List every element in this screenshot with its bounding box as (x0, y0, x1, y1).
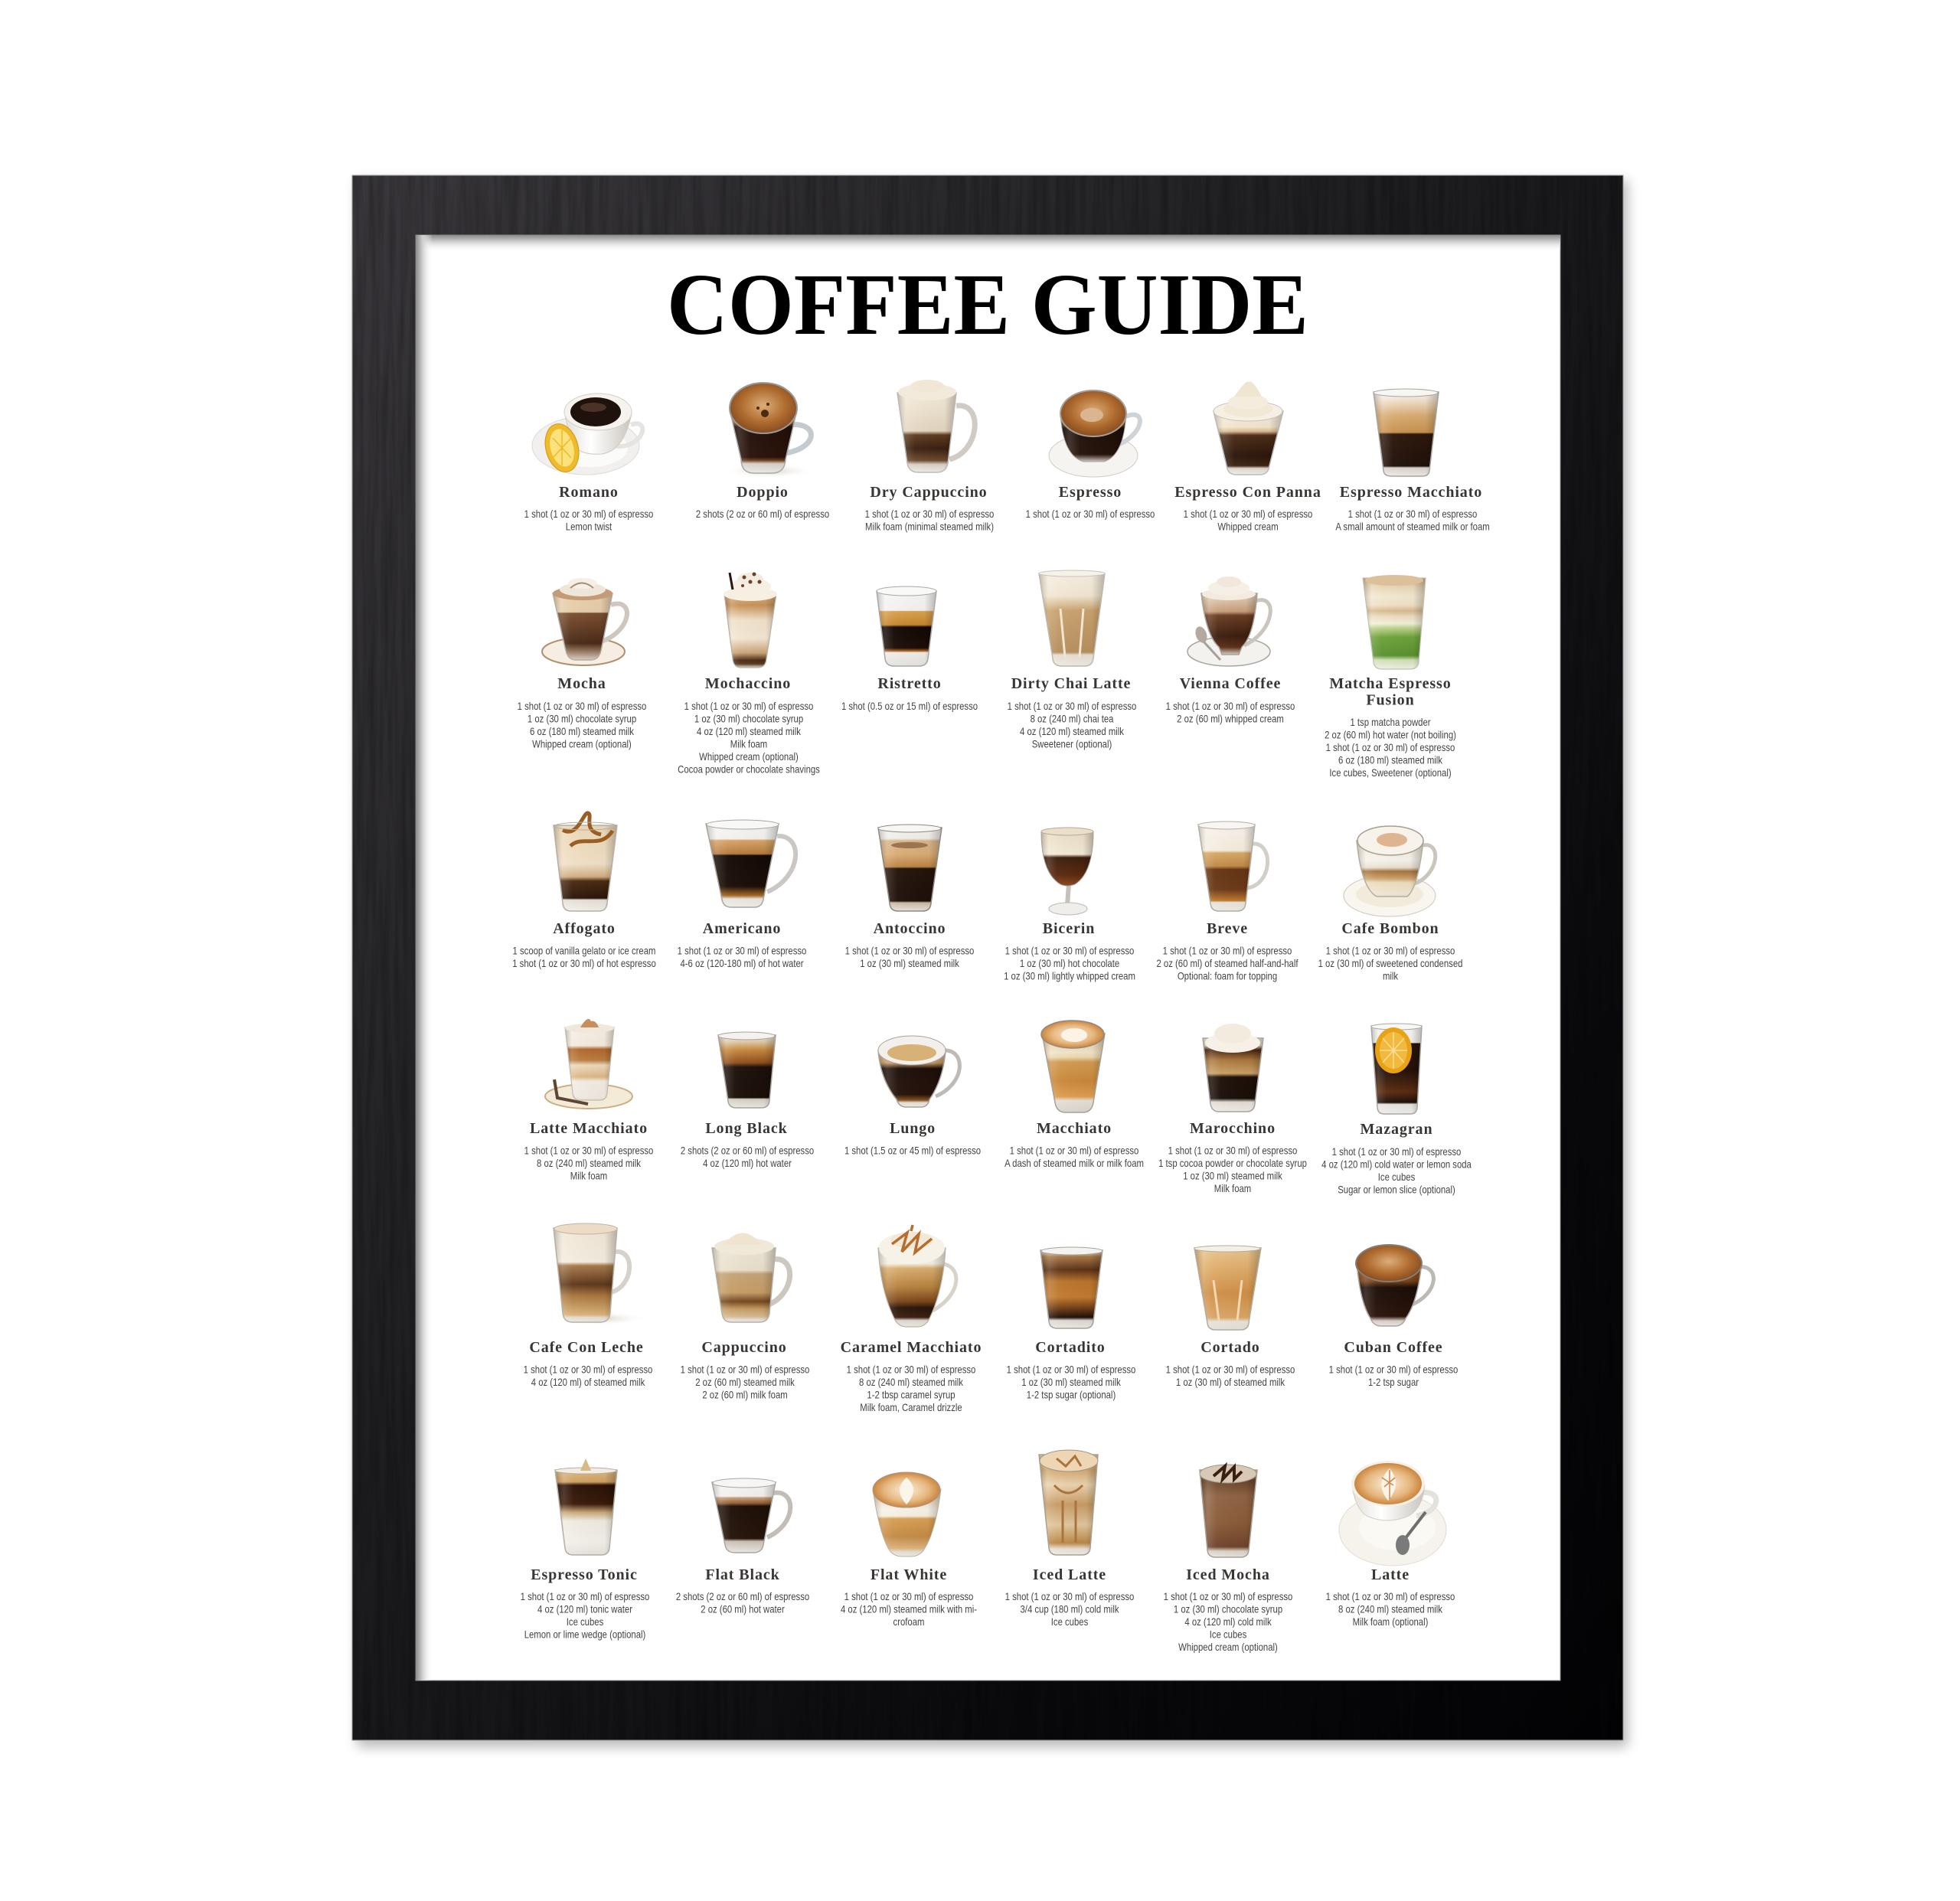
drink: Cuban Coffee (1329, 1245, 1458, 1388)
icon: Doppio glass (724, 383, 815, 479)
drink: Mochaccino (678, 573, 820, 776)
icon: Americano mug (706, 820, 795, 907)
ingredients: A small amount of steamed milk or foam (1335, 520, 1490, 533)
ingredients: 1 shot (1 oz or 30 ml) of espresso (1329, 1363, 1458, 1376)
ingredients: crofoam (893, 1615, 924, 1628)
name: Dirty Chai Latte (1011, 675, 1131, 692)
icon: Romano cup with lemon (532, 394, 642, 475)
ingredients: 1 shot (1 oz or 30 ml) of espresso (1166, 1363, 1295, 1376)
name: Iced Latte (1033, 1566, 1106, 1583)
icon: Long Black glass (718, 1032, 776, 1108)
ingredients: Milk foam (1214, 1182, 1251, 1194)
ingredients: 1 shot (1.5 oz or 45 ml) of espresso (844, 1144, 981, 1157)
ingredients: 1 oz (30 ml) of sweetened condensed (1318, 957, 1462, 969)
drink: Matcha Espresso Fusion (1325, 575, 1456, 779)
drink: Breve (1156, 821, 1298, 982)
ingredients: 1 shot (1 oz or 30 ml) of espresso (521, 1590, 649, 1602)
ingredients: 1 shot (1 oz or 30 ml) of espresso (1166, 700, 1295, 712)
ingredients: Sugar or lemon slice (optional) (1338, 1183, 1455, 1196)
ingredients: 2 oz (60 ml) hot water (not boiling) (1325, 728, 1456, 741)
ingredients: 1 shot (1 oz or 30 ml) of espresso (1184, 508, 1312, 520)
ingredients: 2 shots (2 oz or 60 ml) of espresso (676, 1590, 809, 1602)
title: COFFEE GUIDE (667, 256, 1308, 353)
ingredients: 1 oz (30 ml) chocolate syrup (528, 712, 636, 725)
icon: Cortadito glass (1040, 1247, 1102, 1328)
ingredients: 1-2 tsp sugar (optional) (1027, 1388, 1116, 1401)
ingredients: Sweetener (optional) (1032, 737, 1112, 750)
ingredients: 1 shot (1 oz or 30 ml) of espresso (865, 508, 994, 520)
ingredients: 8 oz (240 ml) steamed milk (537, 1157, 642, 1169)
ingredients: Ice cubes, Sweetener (optional) (1329, 766, 1452, 779)
icon: Macchiato glass (1041, 1021, 1105, 1112)
ingredients: 2 oz (60 ml) milk foam (702, 1388, 788, 1401)
ingredients: 1 oz (30 ml) hot chocolate (1020, 957, 1119, 969)
icon: Iced Mocha tall glass (1200, 1465, 1257, 1557)
icon: Dry Cappuccino mug (897, 380, 975, 472)
name: Vienna Coffee (1180, 675, 1281, 692)
ingredients: Ice cubes (1210, 1628, 1246, 1641)
icon: Marocchino glass (1203, 1024, 1263, 1112)
name: Romano (559, 484, 619, 501)
icon: Caramel Macchiato mug (878, 1225, 956, 1327)
ingredients: 4 oz (120 ml) cold milk (1184, 1615, 1272, 1628)
ingredients: 4 oz (120 ml) steamed milk (1020, 725, 1125, 737)
ingredients: A dash of steamed milk or milk foam (1004, 1157, 1144, 1169)
drink: Antoccino (845, 825, 974, 969)
drink: Cortado (1166, 1246, 1295, 1388)
ingredients: 4 oz (120 ml) cold water or lemon soda (1321, 1158, 1472, 1171)
ingredients: milk (1383, 969, 1399, 982)
ingredients: 1 shot (1 oz or 30 ml) of hot espresso (512, 957, 656, 969)
name: Cafe Bombon (1341, 920, 1439, 937)
ingredients: 1 shot (1 oz or 30 ml) of espresso (681, 1363, 809, 1376)
ingredients: 1 shot (1 oz or 30 ml) of espresso (518, 700, 646, 712)
ingredients: Optional: foam for topping (1178, 969, 1277, 982)
ingredients: 1 shot (1 oz or 30 ml) of espresso (1326, 1590, 1455, 1602)
ingredients: Milk foam, Caramel drizzle (860, 1401, 962, 1413)
ingredients: 1 tsp cocoa powder or chocolate syrup (1158, 1157, 1307, 1169)
ingredients: 1 tsp matcha powder (1350, 716, 1431, 728)
name: Cortadito (1035, 1339, 1106, 1356)
ingredients: 1 shot (1 oz or 30 ml) of espresso (1008, 700, 1136, 712)
name: Marocchino (1190, 1120, 1276, 1137)
drink: Cafe Bombon (1318, 826, 1462, 982)
icon: Cappuccino mug (712, 1233, 790, 1322)
name: Doppio (737, 484, 789, 501)
drink: Iced Mocha (1164, 1465, 1292, 1653)
name: Ristretto (877, 675, 942, 692)
name: Espresso Con Panna (1174, 484, 1321, 501)
name: Cuban Coffee (1344, 1339, 1443, 1356)
ingredients: 4 oz (120 ml) of steamed milk (531, 1376, 645, 1388)
drink: Espresso Macchiato (1335, 389, 1490, 533)
ingredients: 2 oz (60 ml) hot water (701, 1602, 785, 1615)
ingredients: 1 shot (1 oz or 30 ml) of espresso (1168, 1144, 1297, 1157)
ingredients: 3/4 cup (180 ml) cold milk (1021, 1602, 1119, 1615)
name: Antoccino (874, 920, 946, 937)
icon: Cuban Coffee glass (1356, 1245, 1433, 1326)
drink: Cappuccino (681, 1233, 809, 1401)
ingredients: 1-2 tbsp caramel syrup (867, 1388, 956, 1401)
ingredients: 1 shot (1 oz or 30 ml) of espresso (845, 944, 974, 957)
drink: Flat Black (676, 1478, 809, 1615)
ingredients: 1 shot (1 oz or 30 ml) of espresso (1326, 741, 1455, 753)
icon: Cafe Con Leche mug (554, 1223, 647, 1325)
icon: Matcha Espresso Fusion glass (1363, 575, 1426, 669)
ingredients: 8 oz (240 ml) steamed milk (859, 1376, 964, 1388)
name: Breve (1207, 920, 1248, 937)
ingredients: 1 oz (30 ml) steamed milk (1183, 1169, 1282, 1182)
drink: Latte (1326, 1461, 1455, 1628)
ingredients: 1 shot (1 oz or 30 ml) of espresso (844, 1590, 973, 1602)
drink: Bicerin (1004, 828, 1135, 982)
name: Mazagran (1361, 1121, 1432, 1138)
ingredients: Milk foam (570, 1169, 607, 1182)
drink: Espresso Con Panna (1174, 381, 1321, 533)
icon: Antoccino glass (878, 825, 942, 911)
name: Flat White (871, 1566, 947, 1583)
ingredients: 2 oz (60 ml) whipped cream (1177, 712, 1284, 725)
icon: Cafe Bombon glass on saucer (1344, 826, 1436, 916)
drink: Iced Latte (1005, 1450, 1134, 1628)
icon: Espresso Tonic glass (555, 1458, 617, 1555)
icon: Dirty Chai Latte glass (1039, 570, 1105, 666)
icon: Mocha glass on saucer (542, 578, 627, 665)
drink: Dirty Chai Latte (1008, 570, 1136, 750)
ingredients: Whipped cream (optional) (532, 737, 632, 750)
drink: Dry Cappuccino (865, 380, 994, 533)
ingredients: 8 oz (240 ml) chai tea (1031, 712, 1114, 725)
ingredients: Ice cubes (567, 1615, 603, 1628)
ingredients: 4 oz (120 ml) tonic water (537, 1602, 633, 1615)
ingredients: 6 oz (180 ml) steamed milk (1338, 753, 1443, 766)
panel: white poster (416, 235, 1560, 1681)
ingredients: 1 oz (30 ml) steamed milk (860, 957, 959, 969)
panel: black frame (352, 175, 1623, 1740)
name: Iced Mocha (1186, 1566, 1270, 1583)
name: Bicerin (1043, 920, 1095, 937)
ingredients: Lemon or lime wedge (optional) (524, 1628, 645, 1641)
drink: Cafe Con Leche (524, 1223, 652, 1388)
name: Mocha (557, 675, 606, 692)
ingredients: 1 shot (1 oz or 30 ml) of espresso (847, 1363, 975, 1376)
icon: Ristretto shot glass (877, 586, 936, 666)
icon: Espresso Macchiato glass (1374, 389, 1439, 476)
name: Flat Black (705, 1566, 780, 1583)
frame shadow (357, 181, 1628, 1747)
icon: Breve mug (1198, 821, 1268, 911)
name: Caramel Macchiato (841, 1339, 982, 1356)
name: Fusion (1366, 692, 1415, 709)
name: Mochaccino (705, 675, 791, 692)
name: Espresso Macchiato (1340, 484, 1482, 501)
drink: Doppio (696, 383, 829, 520)
drink: Cortadito (1007, 1247, 1135, 1401)
drink: Macchiato (1004, 1021, 1144, 1169)
drink: Espresso (1026, 390, 1155, 520)
icon: Flat White glass with latte art (873, 1472, 941, 1556)
ingredients: 1-2 tsp sugar (1368, 1376, 1419, 1388)
icon: Espresso cup on saucer (1049, 390, 1140, 477)
ingredients: Ice cubes (1051, 1615, 1088, 1628)
ingredients: 2 shots (2 oz or 60 ml) of espresso (696, 508, 829, 520)
ingredients: 1 shot (1 oz or 30 ml) of espresso (1010, 1144, 1138, 1157)
drink: Affogato (512, 813, 656, 969)
ingredients: 1 shot (1 oz or 30 ml) of espresso (1164, 1590, 1292, 1602)
ingredients: 1 shot (1 oz or 30 ml) of espresso (1348, 508, 1477, 520)
drink: Flat White (841, 1472, 977, 1628)
ingredients: 1 shot (1 oz or 30 ml) of espresso (1005, 1590, 1134, 1602)
name: Latte Macchiato (530, 1120, 648, 1137)
drink: Mazagran (1321, 1024, 1472, 1196)
name: Macchiato (1037, 1120, 1112, 1137)
icon: Mochaccino tall glass (724, 573, 777, 668)
ingredients: Whipped cream (1217, 520, 1279, 533)
ingredients: Ice cubes (1378, 1171, 1415, 1183)
drink: Lungo (844, 1036, 981, 1157)
ingredients: 1 shot (1 oz or 30 ml) of espresso (1007, 1363, 1135, 1376)
drink: Mocha (518, 578, 646, 750)
ingredients: 1 oz (30 ml) chocolate syrup (694, 712, 803, 725)
ingredients: 1 shot (1 oz or 30 ml) of espresso (1332, 1145, 1461, 1158)
ingredients: Lemon twist (566, 520, 612, 533)
name: Long Black (705, 1120, 788, 1137)
ingredients: 1 scoop of vanilla gelato or ice cream (513, 944, 655, 957)
ingredients: 1 shot (1 oz or 30 ml) of espresso (1026, 508, 1155, 520)
icon: Latte cup with spoon (1339, 1461, 1446, 1566)
name: Dry Cappuccino (870, 484, 988, 501)
drink: Marocchino (1158, 1024, 1307, 1194)
ingredients: 4 oz (120 ml) steamed milk (697, 725, 802, 737)
name: Espresso (1059, 484, 1122, 501)
name: Latte (1371, 1566, 1410, 1583)
name: Americano (703, 920, 781, 937)
icon: Lungo mug (878, 1036, 959, 1107)
name: Lungo (890, 1120, 936, 1137)
icon: Latte Macchiato glass on saucer (545, 1019, 632, 1109)
name: Affogato (553, 920, 616, 937)
ingredients: Cocoa powder or chocolate shavings (678, 763, 820, 776)
icon: Cortado glass (1194, 1246, 1261, 1330)
name: Matcha Espresso (1329, 675, 1452, 692)
drink: Ristretto (841, 586, 978, 712)
ingredients: 1 oz (30 ml) of steamed milk (1176, 1376, 1285, 1388)
ingredients: 1 shot (1 oz or 30 ml) of espresso (678, 944, 806, 957)
ingredients: 8 oz (240 ml) steamed milk (1338, 1602, 1443, 1615)
ingredients: 1 oz (30 ml) steamed milk (1021, 1376, 1121, 1388)
icon: Bicerin stemmed glass (1041, 828, 1093, 915)
ingredients: 1 shot (1 oz or 30 ml) of espresso (684, 700, 813, 712)
drink: Long Black (681, 1032, 814, 1169)
ingredients: Milk foam (minimal steamed milk) (865, 520, 994, 533)
drink: Romano (524, 394, 653, 533)
ingredients: 1 shot (1 oz or 30 ml) of espresso (1163, 944, 1292, 957)
name: Espresso Tonic (531, 1566, 638, 1583)
ingredients: 2 shots (2 oz or 60 ml) of espresso (681, 1144, 814, 1157)
ingredients: 1 shot (1 oz or 30 ml) of espresso (524, 1144, 653, 1157)
drink: Caramel Macchiato (841, 1225, 982, 1413)
icon: Iced Latte tall glass (1039, 1450, 1098, 1555)
ingredients: Milk foam (optional) (1353, 1615, 1428, 1628)
ingredients: 1 shot (1 oz or 30 ml) of espresso (524, 1363, 652, 1376)
ingredients: 4-6 oz (120-180 ml) of hot water (680, 957, 804, 969)
icon: Espresso Con Panna glass (1214, 381, 1283, 475)
name: Cafe Con Leche (529, 1339, 644, 1356)
ingredients: Milk foam (730, 737, 767, 750)
ingredients: Whipped cream (optional) (1178, 1641, 1278, 1653)
ingredients: 6 oz (180 ml) steamed milk (530, 725, 635, 737)
name: Cortado (1200, 1339, 1260, 1356)
icon: Vienna Coffee glass with spoon (1187, 577, 1270, 666)
ingredients: 1 oz (30 ml) lightly whipped cream (1004, 969, 1135, 982)
ingredients: 4 oz (120 ml) hot water (703, 1157, 792, 1169)
ingredients: Whipped cream (optional) (699, 750, 799, 763)
ingredients: 1 oz (30 ml) chocolate syrup (1174, 1602, 1282, 1615)
icon: Mazagran glass with lemon (1371, 1024, 1422, 1114)
ingredients: 4 oz (120 ml) steamed milk with mi- (841, 1602, 977, 1615)
name: Cappuccino (701, 1339, 787, 1356)
icon: Affogato glass (554, 813, 617, 911)
ingredients: 2 oz (60 ml) of steamed half-and-half (1156, 957, 1298, 969)
ingredients: 1 shot (1 oz or 30 ml) of espresso (1326, 944, 1455, 957)
drink: Latte Macchiato (524, 1019, 653, 1182)
ingredients: 1 shot (1 oz or 30 ml) of espresso (1005, 944, 1134, 957)
icon: Flat Black mug (712, 1478, 790, 1553)
ingredients: 1 shot (0.5 oz or 15 ml) of espresso (841, 700, 978, 712)
drink: Espresso Tonic (521, 1458, 649, 1641)
ingredients: 1 shot (1 oz or 30 ml) of espresso (524, 508, 653, 520)
drink: Americano (678, 820, 806, 969)
ingredients: 2 oz (60 ml) steamed milk (695, 1376, 795, 1388)
drink: Vienna Coffee (1166, 577, 1295, 725)
